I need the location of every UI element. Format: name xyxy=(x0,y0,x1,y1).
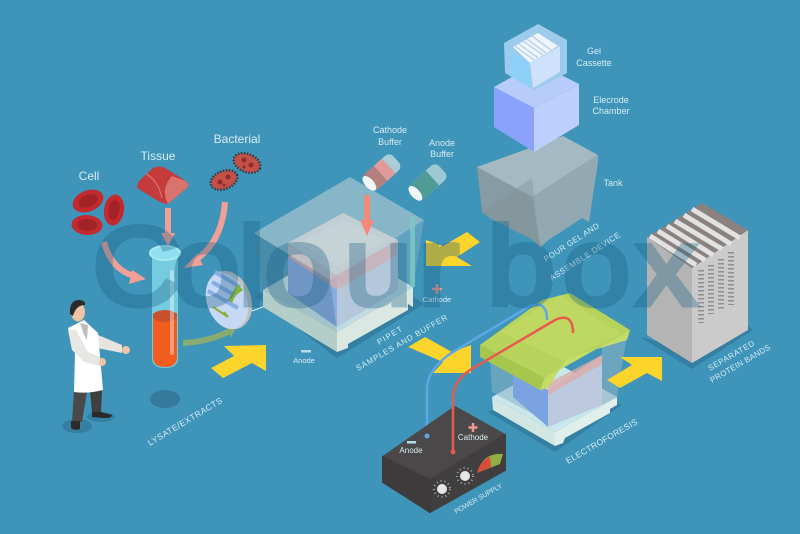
label: cathode buffer: Buffer xyxy=(378,137,402,147)
label: pipet samples and buffer: PIPET xyxy=(375,325,404,347)
label: cathode buffer: Cathode xyxy=(373,125,407,135)
label: tank: Tank xyxy=(603,178,623,188)
label: anode: Anode xyxy=(293,356,315,365)
power supply xyxy=(383,407,505,512)
bottle: anode buffer xyxy=(405,162,449,204)
arrow: tube to lens xyxy=(183,325,238,343)
lens: pipetting detail xyxy=(198,264,348,336)
shadow: scientist xyxy=(62,412,115,433)
icon: red blood cells xyxy=(69,185,126,236)
cable: anode xyxy=(427,305,547,436)
label: anode buffer: Anode xyxy=(429,138,455,148)
electrode chamber xyxy=(494,63,579,152)
shadow: tube xyxy=(150,390,180,408)
label: power supply cathode xyxy=(458,423,489,442)
gel cassette xyxy=(504,24,567,90)
arrow: yellow to electrophoresis xyxy=(408,337,471,373)
tank xyxy=(477,136,598,248)
label: pour gel and assemble device: POUR GEL AND xyxy=(542,221,601,264)
label: power supply cathode: Cathode xyxy=(458,433,489,442)
arrow: bacteria to tube xyxy=(184,202,225,268)
label: electrode chamber: Chamber xyxy=(592,106,630,116)
arrow: yellow to device xyxy=(211,345,266,378)
label: electrophoresis: ELECTROFORESIS xyxy=(564,416,639,466)
label: power supply: POWER SUPPLY xyxy=(454,483,504,516)
bottle: cathode buffer xyxy=(359,152,403,194)
arrow: cell to tube xyxy=(104,242,146,284)
label: tissue: Tissue xyxy=(141,149,176,163)
label: lysate extracts: LYSATE/EXTRACTS xyxy=(146,395,224,448)
label: power supply anode: Anode xyxy=(399,446,423,455)
separated protein bands block xyxy=(640,203,753,369)
label: cell: Cell xyxy=(79,169,99,183)
label: electrode chamber: Elecrode xyxy=(593,95,629,105)
watermark: Colourbox xyxy=(92,203,697,329)
test tube xyxy=(150,246,180,368)
arrow: tissue to tube xyxy=(161,208,175,246)
cable: cathode xyxy=(453,318,573,452)
label: cathode xyxy=(423,284,451,304)
label: gel cassette: Cassette xyxy=(576,58,612,68)
label: anode buffer: Buffer xyxy=(430,149,454,159)
scientist xyxy=(68,300,130,430)
label: power supply anode xyxy=(399,441,423,455)
label: separated protein bands: PROTEIN BANDS xyxy=(708,343,772,385)
device: pipet samples and buffer xyxy=(254,177,424,358)
icon: bacteria xyxy=(208,149,263,194)
label: cathode: Cathode xyxy=(423,295,451,304)
label: gel cassette: Gel xyxy=(587,46,601,56)
icon: tissue slice xyxy=(137,166,188,204)
device: electrophoresis xyxy=(480,293,630,452)
label: pipet samples and buffer: SAMPLES AND BUFFER xyxy=(354,313,449,373)
arrow: yellow to bands xyxy=(607,357,662,388)
arrow: yellow to pipet device xyxy=(426,232,480,266)
label: anode xyxy=(293,350,315,365)
label: bacterial: Bacterial xyxy=(214,132,260,146)
label: separated protein bands: SEPARATED xyxy=(706,339,756,373)
label: pour gel and assemble device: ASSEMBLE DEVICE xyxy=(548,230,622,283)
